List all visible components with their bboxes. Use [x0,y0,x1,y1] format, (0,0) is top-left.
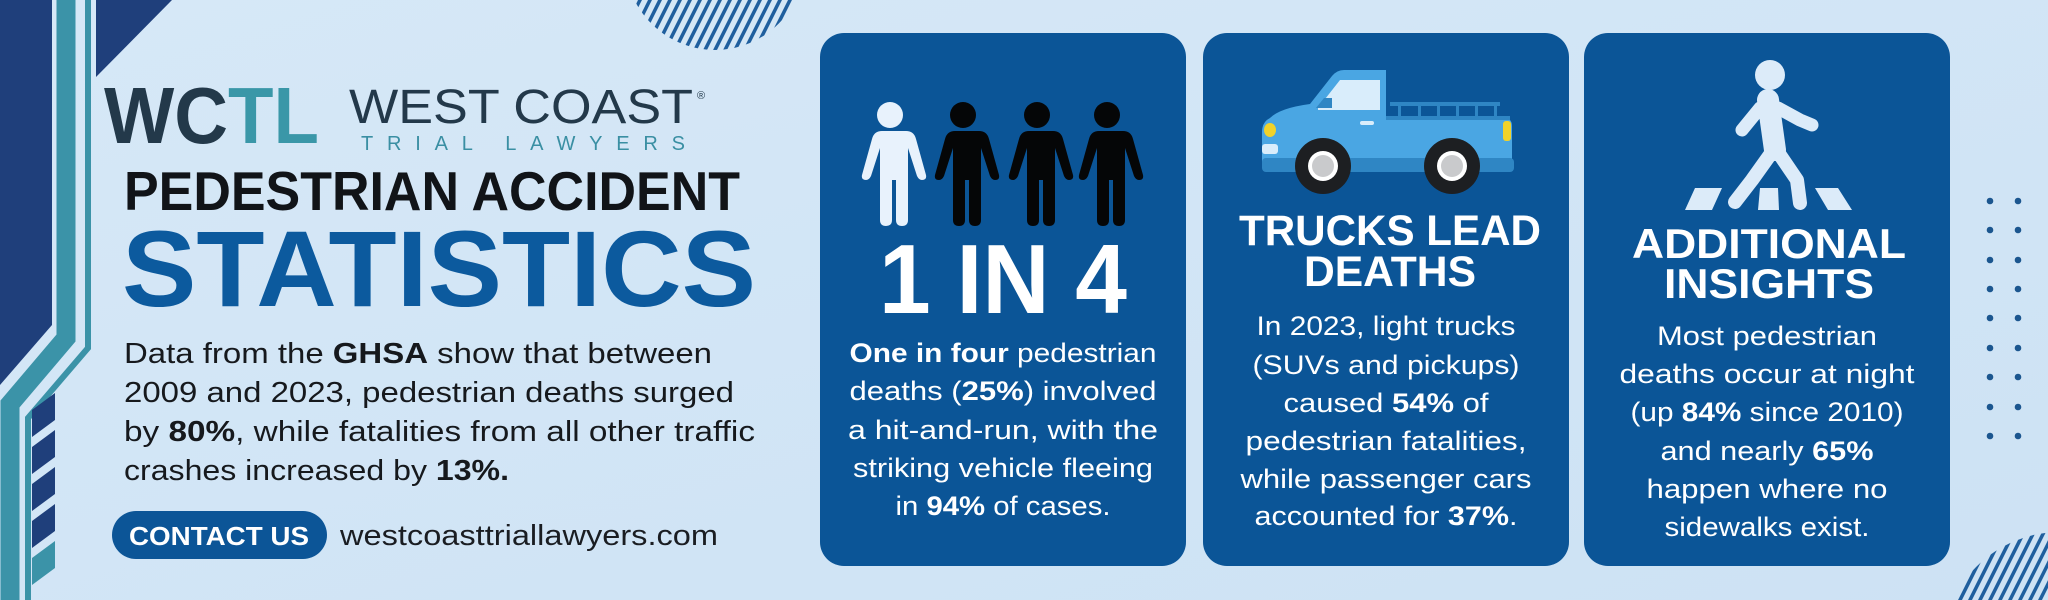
heading: additional insights: INSIGHTS [1664,260,1874,307]
panel 3 text: deaths occur at night [1620,359,1915,389]
intro text [124,338,755,487]
icon: pedestrian crossing [1685,60,1852,210]
icon: pickup truck [1262,70,1514,194]
panel 3 text: happen where no [1646,474,1888,504]
panel 1 text: deaths ( 25% ) involved [850,376,1156,406]
logo: WCTL [104,71,319,160]
logo: WEST COAST [349,81,693,134]
dot grid [1987,198,2021,439]
logo: TRIAL LAWYERS [361,133,685,155]
icon: four people [862,102,1143,226]
contact button [112,511,327,559]
website url: westcoasttriallawyers.com [339,520,718,552]
panel 2 text: In 2023, light trucks [1256,311,1516,341]
panel: trucks lead deaths [1203,33,1569,566]
heading: additional insights [1632,220,1906,307]
decorative striped circle bottom right [1958,533,2048,600]
panel 2 text: while passenger cars [1239,464,1532,494]
panel 3 text: and nearly 65% [1660,436,1874,466]
logo: ® [697,90,705,102]
heading: trucks lead deaths: TRUCKS LEAD [1239,207,1541,255]
panel 3 text [1620,321,1915,542]
panel 1 text: a hit-and-run, with the [848,415,1158,445]
title: pedestrian accident: PEDESTRIAN ACCIDENT [124,160,740,222]
panel 2 text: accounted for 37% . [1254,501,1518,531]
panel 3 text: Most pedestrian [1657,321,1877,351]
heading: additional insights: ADDITIONAL [1632,220,1906,267]
intro text: by 80% , while fatalities from all other traffic [124,416,755,448]
big stat 1 in 4: 1 IN 4 [879,224,1127,334]
panel 1 text [848,338,1158,521]
panel 3 text: sidewalks exist. [1664,512,1870,542]
heading: trucks lead deaths: DEATHS [1304,248,1476,296]
intro text: crashes increased by 13%. [124,455,509,487]
panel 1 text: One in four pedestrian [850,338,1156,368]
heading: trucks lead deaths [1239,207,1541,296]
intro text: 2009 and 2023, pedestrian deaths surged [124,377,734,409]
panel 2 text: caused 54% of [1284,388,1489,418]
panel 3 text: (up 84% since 2010) [1630,397,1904,427]
decorative striped circle top [636,0,792,50]
left decorative bands [0,0,172,600]
panel 1 text: striking vehicle fleeing [853,453,1153,483]
panel 2 text [1239,311,1532,531]
contact button: CONTACT US [129,521,309,551]
panel 2 text: (SUVs and pickups) [1252,350,1520,380]
panel: 1 in 4 [820,33,1186,566]
intro text: Data from the GHSA show that between [124,338,712,370]
title: statistics: STATISTICS [122,208,756,329]
panel 1 text: in 94% of cases. [896,491,1110,521]
panel 2 text: pedestrian fatalities, [1246,426,1526,456]
logo [104,71,705,160]
panel: additional insights [1584,33,1950,566]
